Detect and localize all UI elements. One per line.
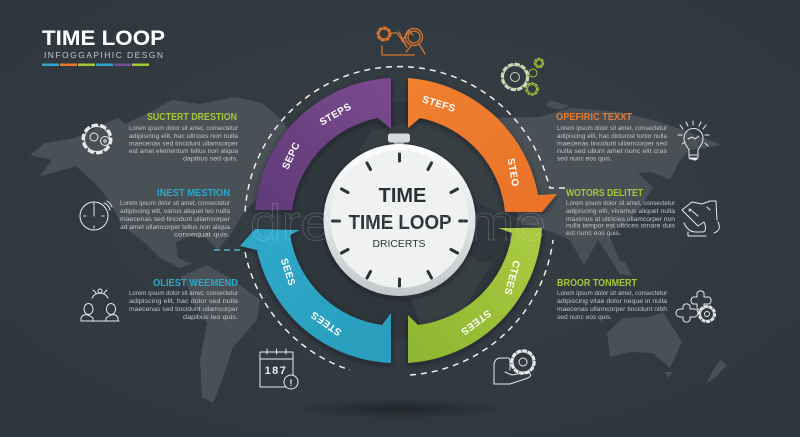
icon: map puzzle (682, 201, 719, 236)
stopwatch (324, 134, 476, 296)
title: TIME LOOP (42, 27, 165, 50)
text block: wotors delitet: est nunc eos quis. (566, 230, 621, 237)
text block: wotors delitet: maximus at ultricies ullamcorper non (566, 216, 676, 223)
text block: broor tonmert: maecenas ullamcorper tincidunt nibh (557, 306, 668, 313)
text block: opefiric texxt: maecenas tincidunt ullamcorper sed (557, 140, 668, 148)
text block: inest mestion (120, 187, 231, 238)
text block: inest mestion: maecenas sed tincidunt ullamcorper (120, 216, 230, 223)
text block: wotors delitet: Lorem ipsum dolor sit amet, consectetur (566, 200, 675, 207)
dashed loop lower left (245, 252, 350, 370)
icon: gear cluster top right (502, 58, 544, 95)
text block: inest mestion: Lorem ipsum dolor sit amet, consectetur (120, 200, 230, 207)
text block: opefiric texxt: sed nunc eos quis. (557, 156, 612, 162)
icon: stopwatch left (80, 201, 112, 230)
crown (388, 134, 410, 146)
purple arc segment: STEPS (318, 101, 354, 128)
text block: oliest weemend: Lorem ipsum dolor sit amet, consectetur (129, 290, 238, 297)
text block: wotors delitet: adipiscing elit, vivamus aliquet nulla (566, 208, 676, 215)
purple arc segment: SEPC (281, 141, 303, 171)
orange arc segment: STEFS (421, 94, 457, 115)
icon: lightbulb (678, 121, 709, 160)
text block: inest mestion: ad amet ullamcorper tellus non aliqua (120, 224, 231, 231)
blue arc segment (240, 229, 391, 363)
text block: suctert drestion: dapibus sed quis. (183, 156, 238, 162)
watch body (324, 144, 476, 296)
icon: calendar (260, 349, 298, 389)
orange arc segment (408, 78, 557, 212)
text block: inest mestion: consequat quis. (174, 232, 230, 238)
text block: broor tonmert (557, 277, 668, 321)
text block: opefiric texxt: Lorem ipsum dolor sit amet, consectetur (557, 125, 667, 132)
subtitle: INFOGGAPIHIC DESGN (44, 50, 163, 60)
text block: wotors delitet: WOTORS DELITET (566, 187, 643, 199)
text block: opefiric texxt: nulla sed ullum amet nunc elit cras (557, 148, 667, 155)
text block: oliest weemend (129, 277, 239, 321)
dashed loop upper (245, 67, 565, 214)
watermark: dreamstime (250, 195, 546, 251)
text block: opefiric texxt: adipiscing elit, hac dictumst tortor nulla (557, 133, 667, 140)
icon: hand with gear (494, 350, 534, 384)
world map (30, 97, 727, 403)
text block: oliest weemend: dapibus leo quis. (183, 314, 238, 321)
icon: gears left (83, 125, 111, 153)
text block: broor tonmert: BROOR TONMERT (557, 277, 637, 289)
text block: suctert drestion: Lorem ipsum dolor sit amet, consectetur (129, 125, 238, 132)
text block: oliest weemend: adipiscing elit, hac dolor sed nulla (129, 298, 239, 305)
inner ring shade (282, 102, 518, 338)
dashed loop lower right (410, 240, 553, 375)
ground shadow (290, 399, 510, 419)
text block: opefiric texxt (556, 111, 668, 162)
text block: broor tonmert: adipiscing vitae dolor neque in nulla (557, 298, 668, 305)
stopwatch: DRICERTS (372, 238, 426, 250)
green arc segment: STEES (458, 307, 493, 337)
text block: opefiric texxt: OPEFIRIC TEXXT (556, 111, 633, 123)
text block: wotors delitet (566, 187, 676, 237)
text block: oliest weemend: OLIEST WEEMEND (153, 277, 238, 289)
watch text: TIME (379, 185, 426, 207)
dashed teal connector (214, 249, 243, 251)
blue arc segment: STEES (309, 309, 344, 338)
icon: orange process (378, 28, 425, 55)
colour bars (42, 64, 149, 66)
icon: calendar: ! (290, 378, 292, 388)
text block: suctert drestion: SUCTERT DRESTION (147, 111, 237, 123)
icon: people meeting (81, 289, 119, 321)
icon: calendar: 187 (265, 365, 287, 377)
text block: inest mestion: INEST MESTION (157, 187, 230, 199)
stopwatch: TIME LOOP (348, 212, 452, 234)
text block: wotors delitet: nulla tempor est ultrices ornare duis (566, 222, 675, 230)
text block: suctert drestion: est amet elementum tellus non aliqua (129, 148, 239, 155)
icon: puzzle and gear (676, 291, 715, 322)
text block: broor tonmert: sed nunc eos quis. (557, 314, 612, 321)
purple arc segment (255, 78, 391, 210)
text block: broor tonmert: Lorem ipsum dolor sit amet, consectetur (557, 290, 667, 297)
text block: suctert drestion: adipiscing elit, hac ultrices non nulla (129, 133, 239, 140)
green arc segment (408, 228, 542, 363)
green arc segment: CTEES (502, 259, 521, 296)
tick marks (332, 154, 466, 286)
blue arc segment: SEES (278, 257, 297, 287)
title block (42, 27, 165, 66)
text block: oliest weemend: maecenas sed tincidunt ullamcorper (129, 306, 238, 313)
text block: suctert drestion (129, 111, 239, 162)
orange arc segment: STEO (505, 157, 520, 188)
text block: inest mestion: adipiscing elit, varius aliquet leo nulla (120, 208, 231, 215)
text block: suctert drestion: maecenas sed tincidunt ullamcorper (129, 140, 238, 148)
